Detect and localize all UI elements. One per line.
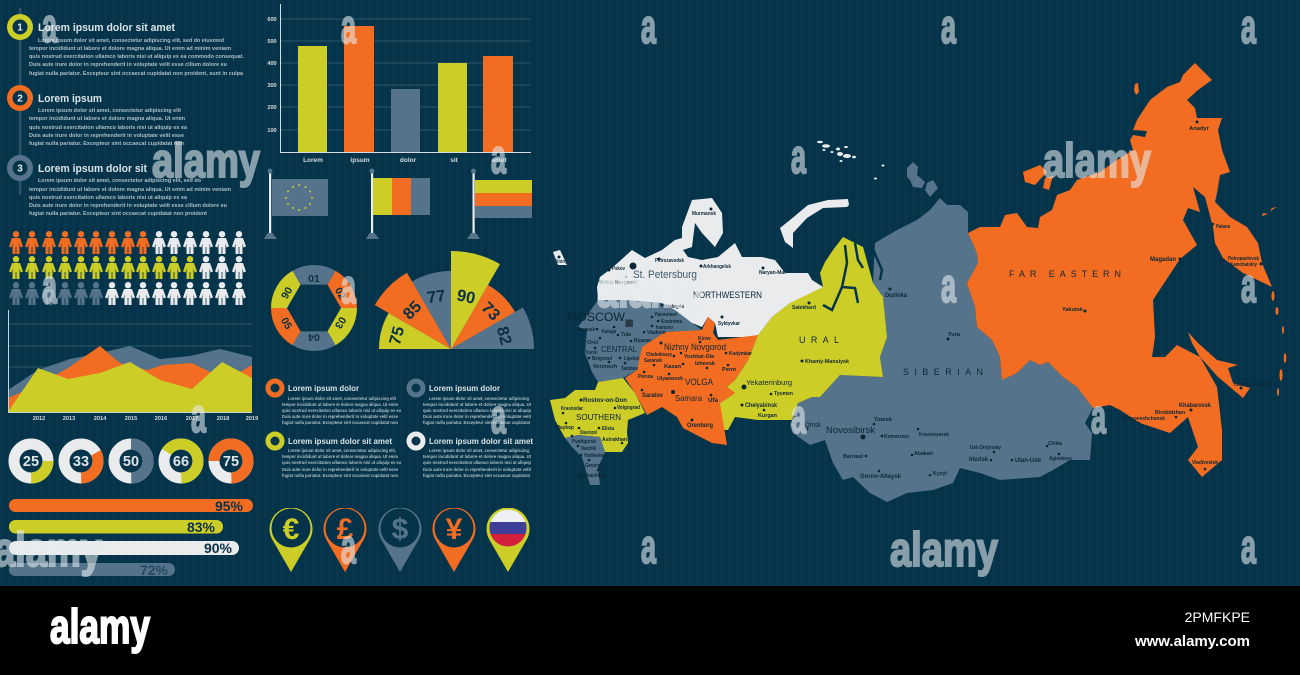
city labels: Siberian: Omsk — [805, 422, 821, 429]
hexagonal ring chart: 03 — [332, 314, 348, 331]
area chart: 2013 — [63, 416, 75, 422]
watermark: alamy — [890, 524, 998, 577]
city labels: central: Voronezh — [593, 364, 617, 370]
city labels: Ural: Tyumen — [774, 391, 793, 397]
city labels: Ural: URAL — [799, 335, 839, 345]
area chart: 2014 — [94, 416, 107, 422]
city labels: Ural — [740, 302, 849, 419]
bar chart: 400 — [267, 61, 277, 67]
city labels: Volga: Penza — [638, 374, 653, 380]
donut charts — [14, 438, 248, 484]
city labels: Southern: Krasnodar — [561, 406, 583, 412]
city labels: Siberian: Novosibirsk — [826, 425, 876, 435]
item 2: Duis aute irure dolor in reprehenderit in voluptate velit esse — [29, 133, 184, 139]
icon: euro pin: € — [283, 513, 300, 546]
watermark: a — [941, 1, 956, 54]
city labels: northwest: Pskov — [612, 266, 625, 272]
city labels: Far Eastern: Kamchatskiy — [1230, 262, 1257, 268]
watermark: a — [1241, 260, 1256, 313]
city labels: Ural: Salekhard — [792, 305, 816, 311]
city labels: Volga: Ufa — [708, 398, 719, 404]
watermark: a — [791, 391, 806, 444]
footer bar: 2PMFKPE — [1185, 609, 1250, 625]
city labels: central: Kaluga — [602, 329, 616, 335]
area chart: 2012 — [33, 416, 45, 422]
legend item: slate: Lorem ipsum dolor — [429, 383, 501, 393]
city labels: Southern: Pyatigorsk — [572, 439, 596, 445]
legend item: slate: fugiat nulla pariatur. Excepteur sint occaecat cupidatat — [423, 420, 530, 425]
city labels: Southern: Elista — [602, 426, 614, 432]
legend item: orange: quis nostrud exercitation ullamco laboris nisi ut aliquip ex ea — [282, 408, 401, 413]
city labels: northwest: St. Petersburg — [633, 269, 697, 281]
city labels: Volga: Izhevsk — [695, 361, 715, 367]
region: Northwestern — [597, 198, 823, 337]
city labels: Ural: Khanty-Mansiysk — [805, 359, 849, 365]
item 2: quis nostrud exercitation ullamco laboris nisi ut aliquip ex ea — [29, 125, 188, 131]
area chart: 2018 — [217, 416, 229, 422]
watermark: a — [791, 131, 806, 184]
legend item: white: Lorem ipsum dolor sit amet — [429, 436, 533, 446]
legend item: slate — [409, 381, 531, 425]
city labels: Volga: Yoshkar-Ola — [684, 354, 714, 360]
city labels: central: Yaroslavl — [654, 312, 678, 318]
city labels: central: Tambov — [621, 366, 638, 372]
city labels: Siberian: Abakan — [914, 451, 933, 457]
region: Far Eastern — [967, 63, 1272, 477]
region: Ural — [718, 237, 887, 430]
city labels: Southern: SOUTHERN — [576, 413, 621, 422]
city labels: Volga: Nizhny Novgorod — [664, 342, 726, 352]
city labels: Siberian: Ulan-Ude — [1015, 458, 1042, 464]
area chart: 2015 — [125, 416, 137, 422]
item 1: Duis aute irure dolor in reprehenderit in voluptate velit esse cillum dolore eu — [29, 62, 228, 68]
icon: yen pin: ¥ — [446, 513, 463, 546]
item 2: 2 — [17, 94, 23, 104]
watermark: a — [641, 1, 656, 54]
hexagonal ring chart — [271, 265, 357, 351]
city labels: central: Lipetsk — [624, 356, 639, 362]
panel: numbered text list — [7, 8, 244, 217]
city labels: central: Vladimir — [647, 330, 666, 336]
city labels: Volga: Kudymkar — [729, 351, 752, 357]
watermark: a — [191, 390, 206, 443]
city labels: Siberian: Krasnoyarsk — [919, 432, 949, 438]
city labels: Southern: Astrakhan — [602, 437, 627, 443]
region: Southern — [550, 378, 645, 452]
item 2: Lorem ipsum dolor sit amet, consectetur adipiscing elit — [38, 108, 181, 114]
legend item: white: Lorem ipsum dolor sit amet, consectetur adipiscing — [429, 448, 529, 453]
city labels: Ural: Kurgan — [758, 413, 777, 419]
legend item: orange: Lorem ipsum dolor sit amet, consectetur adipiscing elit — [288, 396, 396, 401]
bar chart: ipsum — [350, 157, 370, 164]
city labels: Southern — [556, 397, 640, 479]
item 2: Lorem ipsum — [38, 93, 102, 105]
city labels: Southern: Volgograd — [617, 405, 640, 411]
region: Volga — [625, 317, 758, 445]
city labels: Far Eastern: Palana — [1216, 224, 1230, 230]
city labels: Southern: Rostov-on-Don — [583, 397, 627, 404]
item 1 — [7, 14, 244, 77]
progress bars: 83% — [187, 519, 216, 535]
watermark: alamy — [1043, 135, 1151, 188]
area chart: 2016 — [155, 416, 167, 422]
city labels: Volga: Samara — [675, 393, 702, 403]
watermark: a — [341, 1, 356, 54]
legend item: white: quis nostrud exercitation ullamco laboris nisi ut aliquip — [423, 460, 531, 465]
bar chart: Lorem — [303, 157, 323, 164]
city labels: Siberian: Kyzyl — [933, 471, 948, 477]
footer bar — [0, 586, 1300, 675]
bar chart: 100 — [267, 128, 277, 134]
item 3 — [7, 155, 231, 217]
donut charts: 33 — [73, 454, 89, 470]
fan chart — [375, 251, 534, 349]
legend item: white: Duis aute irure dolor in reprehenderit in voluptate velit — [423, 467, 531, 472]
icon: pound pin: £ — [337, 513, 354, 546]
legend item: white: tempor incididunt ut labore et dolore magna aliqua. Ut — [423, 454, 531, 459]
city labels: central: Tula — [621, 332, 631, 338]
item 2: tempor incididunt ut labore et dolore magna aliqua. Ut enim — [29, 116, 185, 122]
region: North Caucasus — [565, 435, 605, 485]
city labels: central: Ivanovo — [656, 325, 673, 331]
region: Siberian — [790, 198, 1093, 502]
city labels: Far Eastern: Blagoveshchensk — [1123, 416, 1165, 422]
icon: Russia flag pin — [486, 507, 530, 572]
fan chart: 75 — [386, 325, 408, 347]
city labels: central: MOSCOW — [567, 310, 626, 324]
bar chart: dolor — [400, 157, 417, 164]
city labels: Siberian — [805, 288, 1072, 480]
donut charts: 25 — [23, 454, 39, 470]
city labels: northwest — [550, 208, 786, 327]
legend item: white — [409, 434, 533, 478]
city labels: Volga: Saransk — [644, 358, 662, 364]
city labels: Ural: Chelyabinsk — [745, 403, 778, 409]
city labels: northwest: Arkhangelsk — [703, 264, 731, 270]
footer bar: alamy — [50, 601, 150, 654]
legend item: slate: Duis aute irure dolor in reprehenderit in voluptate velit — [423, 414, 531, 419]
city labels: central: Kostroma — [661, 319, 682, 325]
legend item: yellow: Lorem ipsum dolor sit amet, consectetur adipiscing elit, — [288, 448, 396, 453]
watermark: a — [42, 0, 57, 53]
bar chart: amet — [491, 157, 507, 164]
city labels: northwest: Syktyvkar — [718, 321, 740, 327]
city labels: Far Eastern: Petropavlovsk — [1228, 256, 1259, 262]
bar chart: 200 — [267, 105, 277, 111]
city labels: Southern: Nalchik — [581, 446, 596, 452]
flag: EU — [264, 168, 328, 239]
legend item: slate: Lorem ipsum dolor sit amet, consectetur adipiscing — [429, 396, 529, 401]
city labels: Southern: Makhachkala — [577, 473, 607, 479]
legend item: yellow: quis nostrud exercitation ullamco laboris nisi ut aliquip ex ea — [282, 460, 401, 465]
donut charts: 66 — [173, 454, 189, 470]
hexagonal ring chart: 02 — [332, 285, 348, 302]
city labels: Siberian: Aginskoye — [1049, 456, 1072, 462]
region: Central — [578, 300, 702, 382]
bar chart: 300 — [267, 83, 277, 89]
watermark: a — [491, 131, 506, 184]
islands: Franz Josef Land — [817, 141, 884, 180]
city labels: Volga: Cheboksary — [646, 352, 672, 358]
item 3: Lorem ipsum dolor sit — [38, 163, 147, 175]
city labels: Southern: Maykop — [556, 425, 574, 431]
watermark: a — [941, 260, 956, 313]
donut charts: 75 — [223, 454, 239, 470]
legend item: yellow: Duis aute irure dolor in reprehenderit in voluptate velit esse — [282, 467, 398, 472]
city labels: Volga: Kirov — [698, 336, 711, 342]
city labels: Far Eastern: Anadyr — [1189, 126, 1209, 132]
city labels: Far Eastern: Khabarovsk — [1179, 403, 1212, 409]
legend item: orange: Duis aute irure dolor in reprehenderit in voluptate velit esse — [282, 414, 398, 419]
item 3: quis nostrud exercitation ullamco laboris nisi ut aliquip ex ea — [29, 195, 188, 201]
city labels: Siberian: Kemerovo — [884, 434, 909, 440]
city labels: Volga: Kazan — [664, 364, 681, 370]
city labels: Far Eastern — [1009, 120, 1272, 470]
city labels: Siberian: Chita — [1048, 441, 1062, 447]
watermark: a — [1091, 391, 1106, 444]
fan chart: 90 — [455, 286, 477, 308]
city labels: Far Eastern: Birobidzhan — [1155, 410, 1185, 416]
legend item: slate: quis nostrud exercitation ullamco laboris nisi ut aliquip — [423, 408, 531, 413]
city labels: northwest: Vologda — [666, 304, 684, 310]
item 2 — [7, 85, 188, 147]
city labels: Volga: Orenburg — [687, 423, 713, 429]
legend item: slate: tempor incididunt ut labore et dolore magna aliqua. Ut — [423, 402, 531, 407]
city labels: Far Eastern: Magadan — [1150, 257, 1176, 263]
legend item: yellow: fugiat nulla pariatur. Excepteur sint occaecat cupidatat non — [282, 473, 398, 478]
legend item: orange: fugiat nulla pariatur. Excepteur sint occaecat cupidatat non — [282, 420, 398, 425]
watermark: alamy — [597, 265, 705, 318]
icon: yen pin — [432, 507, 476, 572]
item 1: quis nostrud exercitation ullamco laboris nisi ut aliquip ex ea commodo consequat. — [29, 54, 244, 60]
city labels: central: Orel — [587, 340, 599, 346]
item 3: fugiat nulla pariatur. Excepteur sint occaecat cupidatat non proident — [29, 211, 207, 217]
item 2: fugiat nulla pariatur. Excepteur sint occaecat cupidatat non — [29, 141, 185, 147]
fan chart: 77 — [426, 287, 447, 307]
icon: pound pin — [324, 507, 366, 572]
item 1: Lorem ipsum dolor sit amet, consectetur adipiscing elit, sed do eiusmod — [38, 38, 225, 44]
islands: Severnaya Zemlya — [907, 162, 938, 197]
watermark: a — [42, 261, 57, 314]
legend item: orange — [268, 381, 401, 425]
fan chart: 85 — [400, 298, 425, 323]
city labels: Volga: VOLGA — [685, 377, 713, 387]
city labels: Siberian: SIBERIAN — [903, 367, 983, 377]
bar chart: 600 — [267, 17, 277, 23]
city labels: Siberian: Ust-Ordynsky — [970, 445, 1001, 451]
bar chart: 500 — [267, 39, 277, 45]
city labels: northwest: Velikiy Novgorod — [599, 280, 637, 286]
hexagonal ring chart: 04 — [308, 331, 320, 343]
city labels: Siberian: Gorno-Altaysk — [860, 474, 902, 480]
item 3: Duis aute irure dolor in reprehenderit in voluptate velit esse cillum dolore eu — [29, 203, 228, 209]
city labels: Southern: Stavropol — [580, 430, 597, 436]
legend item: orange: Lorem ipsum dolor — [288, 383, 360, 393]
hexagonal ring chart: 01 — [308, 273, 320, 285]
city labels: Far Eastern: Yakutsk — [1062, 307, 1083, 313]
watermark: a — [341, 261, 356, 314]
city labels: central: Kursk — [586, 350, 597, 356]
watermark: a — [641, 521, 656, 574]
icon: euro pin — [270, 507, 312, 572]
legend item: white: fugiat nulla pariatur. Excepteur sint occaecat cupidatat — [423, 473, 530, 478]
islands: Sakhalin and Arctic coast — [1023, 83, 1277, 398]
fan chart: 73 — [478, 299, 503, 324]
city labels: central: Belgorod — [592, 356, 612, 362]
city labels: central: Bryansk — [577, 327, 595, 333]
icon: dollar pin — [378, 507, 422, 572]
city labels: Volga: Ulyanovsk — [657, 376, 683, 382]
city labels: Siberian: Dudinka — [885, 293, 908, 299]
city labels: Ural: Yekaterinburg — [746, 380, 792, 387]
city labels: Far Eastern: FAR EASTERN — [1009, 269, 1121, 279]
legend item: yellow: tempor incididunt ut labore et dolore magna aliqua. Ut enim — [282, 454, 398, 459]
legend item: orange: tempor incididunt ut labore et dolore magna aliqua. Ut enim — [282, 402, 398, 407]
bar chart: sit — [450, 157, 459, 164]
city labels: northwest: Kaliningrad — [550, 259, 575, 265]
watermark: alamy — [152, 135, 260, 188]
city labels: Southern: Vladikavkaz — [584, 453, 605, 459]
watermark: a — [341, 521, 356, 574]
city labels: Far Eastern: Yuzhno-Sakhalinsk — [1233, 382, 1272, 388]
bar chart — [267, 4, 531, 164]
area chart — [8, 310, 258, 422]
area chart: 2019 — [246, 416, 258, 422]
city labels: Southern: Grozny — [585, 463, 602, 469]
city labels: Siberian: Barnaul — [843, 454, 864, 460]
islands: Novaya Zemlya — [780, 199, 849, 248]
map of Russia — [550, 63, 1286, 502]
watermark: a — [491, 391, 506, 444]
city labels: central: CENTRAL — [601, 345, 638, 354]
city labels: northwest: NORTHWESTERN — [693, 290, 762, 300]
legend item: yellow: Lorem ipsum dolor sit amet — [288, 436, 392, 446]
rivers on Ural — [823, 243, 882, 310]
donut charts: 50 — [123, 454, 139, 470]
progress bars: 90% — [204, 540, 233, 556]
legend item: yellow — [268, 434, 401, 478]
watermark: a — [1241, 521, 1256, 574]
icon: dollar pin: $ — [392, 513, 409, 546]
progress bars: 72% — [140, 562, 169, 578]
city labels: Siberian: Tomsk — [874, 417, 892, 423]
fan chart: 82 — [493, 325, 515, 347]
watermark: a — [1241, 1, 1256, 54]
city labels: central: Ryazan — [634, 338, 651, 344]
flag: vertical tricolour — [366, 168, 430, 239]
city labels: northwest: Petrozavodsk — [655, 258, 684, 264]
area chart: 2017 — [186, 416, 198, 422]
people pictogram chart — [9, 231, 246, 305]
city labels: Volga: Saratov — [642, 393, 664, 399]
footer bar: www.alamy.com — [1134, 633, 1250, 650]
region: Kaliningrad — [553, 250, 567, 265]
city labels: Far Eastern: Vladivostok — [1192, 460, 1218, 466]
islands: Kuril chain — [1272, 291, 1286, 396]
city labels: Volga: Perm — [722, 367, 737, 373]
item 3: Lorem ipsum dolor sit amet, consectetur adipiscing elit, sed do — [38, 178, 202, 184]
city labels: Siberian: Irkutsk — [969, 457, 989, 463]
item 1: tempor incididunt ut labore et dolore magna aliqua. Ut enim ad minim veniam — [29, 46, 231, 52]
city labels: northwest: Naryan-Mar — [759, 270, 786, 276]
city labels: northwest: Murmansk — [692, 211, 716, 217]
item 1: Lorem ipsum dolor sit amet — [38, 22, 175, 34]
city labels: Volga — [638, 336, 752, 429]
progress bars: 95% — [215, 498, 244, 514]
hexagonal ring chart: 06 — [278, 284, 294, 301]
hexagonal ring chart: 05 — [278, 315, 294, 332]
item 1: fugiat nulla pariatur. Excepteur sint occaecat cupidatat non proident, sunt in culpa — [29, 71, 244, 77]
city labels: central — [567, 310, 682, 372]
item 3: tempor incididunt ut labore et dolore magna aliqua. Ut enim ad minim veniam — [29, 187, 231, 193]
item 3: 3 — [17, 164, 23, 174]
city labels: Siberian: Tura — [948, 332, 960, 338]
progress bars — [9, 498, 253, 578]
flag: horizontal tricolour — [467, 168, 532, 239]
item 1: 1 — [17, 22, 23, 34]
